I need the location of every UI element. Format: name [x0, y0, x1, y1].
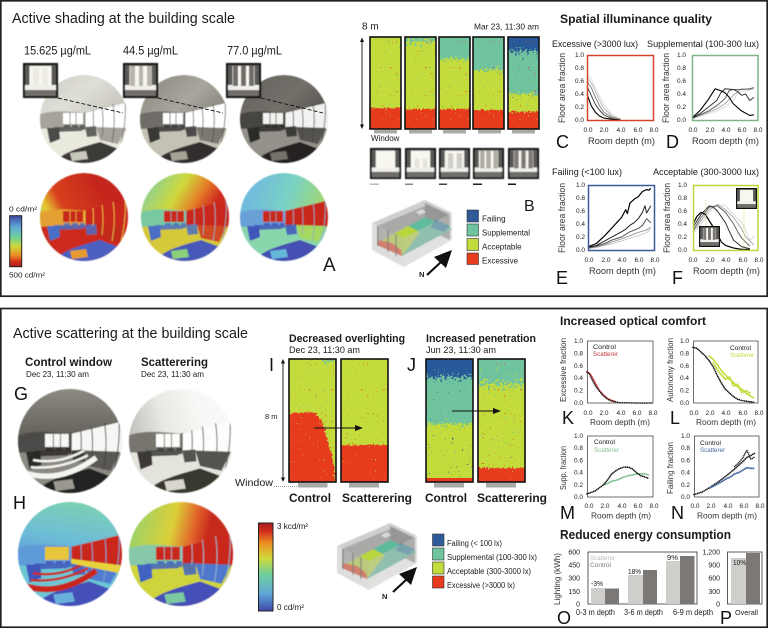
- chart E: failing: [552, 167, 660, 277]
- bar chart P: overall: 1,200: [702, 550, 720, 556]
- panel letter H: H: [13, 493, 26, 513]
- heading: decreased overlighting: Dec 23, 11:30 am: [289, 345, 360, 355]
- north arrow B: [419, 250, 452, 279]
- chart E: failing: 0.4: [576, 221, 585, 228]
- window bars I/J: [298, 483, 516, 488]
- heatmap B3: [438, 36, 471, 130]
- chart K: excessive fraction: 2.0: [599, 410, 609, 417]
- panel letter F: F: [672, 268, 683, 288]
- chart E: failing: 0.0: [576, 247, 585, 254]
- panel letter D: D: [666, 132, 679, 152]
- concentration labels: 44.5 µg/mL: [123, 46, 179, 58]
- concentration labels: [24, 46, 283, 58]
- chart K: excessive fraction: 0.0: [574, 400, 583, 407]
- chart L: autonomy fraction: [665, 338, 764, 427]
- colour bar A: 0 cd/m²: [9, 206, 38, 214]
- 8 m label: 8 m: [265, 412, 278, 421]
- panel B header: 8 m: [362, 22, 379, 32]
- chart E: failing: 0.6: [576, 208, 585, 215]
- chart D: supplemental: [647, 39, 763, 147]
- chart L: autonomy fraction: 0.2: [680, 388, 689, 395]
- bar chart O: lighting by depth: 600: [568, 550, 580, 556]
- window label: Window: [235, 478, 274, 489]
- inset B1: [370, 148, 401, 179]
- bar chart O: lighting by depth: Control: [590, 562, 612, 569]
- chart M: supplemental fraction: 0.2: [574, 482, 583, 489]
- chart D: supplemental: 0.0: [688, 127, 698, 134]
- panel letter I: I: [269, 355, 274, 375]
- chart E: failing: 0.2: [576, 234, 585, 241]
- chart N: failing fraction: 0.0: [690, 503, 700, 510]
- chart K: excessive fraction: Excessive fraction: [558, 338, 568, 402]
- chart N: failing fraction: 6.0: [739, 503, 749, 510]
- chart L: autonomy fraction: 6.0: [738, 410, 748, 417]
- shading dashed line: [58, 98, 323, 113]
- chart C: excessive: 1.0: [575, 52, 584, 59]
- chart F: acceptable: 0.0: [688, 257, 698, 264]
- heatmap labels: [289, 491, 547, 505]
- chart M: supplemental fraction: Supp. fraction: [558, 446, 568, 490]
- chart C: excessive: [552, 39, 659, 147]
- inset B5: [508, 148, 539, 179]
- panel B header: Mar 23, 11:30 am: [474, 22, 539, 32]
- chart F: acceptable: Acceptable (300-3000 lux): [653, 167, 759, 177]
- chart K: excessive fraction: 6.0: [632, 410, 642, 417]
- chart F: acceptable: 0.4: [678, 221, 687, 228]
- legend B: Supplemental: [482, 228, 530, 238]
- chart D: supplemental: 0.4: [677, 91, 686, 98]
- chart M: supplemental fraction: 6.0: [633, 503, 643, 510]
- chart E: failing: 8.0: [650, 257, 660, 264]
- bar chart O: lighting by depth: 450: [568, 562, 580, 570]
- colour bar H: [258, 522, 308, 612]
- chart L: autonomy fraction: Autonomy fraction: [665, 338, 675, 402]
- window inset row B: [370, 148, 539, 179]
- bar chart O: lighting by depth: 3-6 m depth: [624, 608, 663, 617]
- heading: scatterering: Dec 23, 11:30 am: [141, 370, 204, 379]
- chart C: excessive: 0.8: [575, 65, 584, 72]
- chart K: excessive fraction: 0.0: [583, 410, 593, 417]
- chart L: autonomy fraction: 0.6: [680, 363, 689, 370]
- chart C: excessive: Floor area fraction: [557, 53, 568, 123]
- chart E: failing: Failing (<100 lux): [552, 167, 622, 177]
- chart F: acceptable: 0.2: [678, 234, 687, 241]
- heading: increased penetration: Jun 23, 11:30 am: [426, 345, 496, 355]
- chart L: autonomy fraction: Room depth (m): [696, 417, 756, 427]
- chart E: failing: 0.8: [576, 195, 585, 202]
- heatmap J control: [425, 358, 474, 483]
- fisheye: control window render: [15, 389, 125, 496]
- chart L: autonomy fraction: 1.0: [680, 338, 689, 345]
- legend B: [467, 210, 530, 266]
- window inset: 15.625: [23, 63, 58, 98]
- chart N: failing fraction: 2.0: [706, 503, 716, 510]
- panel: active scattering frame: [1, 308, 767, 627]
- luminance map: scatterering: [126, 502, 236, 609]
- chart C: excessive: 0.0: [575, 117, 584, 124]
- colour bar H: 0 cd/m²: [277, 603, 304, 612]
- chart K: excessive fraction: Control: [593, 344, 617, 351]
- chart L: autonomy fraction: 0.8: [680, 350, 689, 357]
- chart K: excessive fraction: 0.6: [574, 363, 583, 370]
- concentration labels: 15.625 µg/mL: [24, 46, 92, 58]
- chart M: supplemental fraction: 2.0: [600, 503, 610, 510]
- bar chart O: lighting by depth: 0: [576, 602, 580, 608]
- chart M: supplemental fraction: [558, 433, 659, 520]
- legend I/J: Acceptable (300-3000 lx): [447, 567, 531, 576]
- chart M: supplemental fraction: 4.0: [617, 503, 627, 510]
- chart C: excessive: Excessive (>3000 lux): [552, 39, 638, 49]
- bar chart O: lighting by depth: 0-3 m depth: [576, 608, 615, 617]
- chart L: autonomy fraction: 0.0: [689, 410, 699, 417]
- panel letter G: G: [14, 384, 28, 404]
- chart L: autonomy fraction: 2.0: [705, 410, 715, 417]
- chart C: excessive: 0.6: [575, 78, 584, 85]
- heading: increased penetration: [426, 333, 536, 355]
- title: active shading: Active shading at the building scale: [12, 11, 235, 27]
- chart F: acceptable: 0.0: [678, 247, 687, 254]
- legend B: Acceptable: [482, 242, 522, 252]
- inset B4: [473, 148, 504, 179]
- heading: control window: [25, 355, 113, 379]
- chart C: excessive: 2.0: [599, 127, 609, 134]
- heading: control window: Control window: [25, 355, 113, 369]
- window label: [235, 478, 298, 489]
- chart N: failing fraction: 4.0: [723, 503, 733, 510]
- chart N: failing fraction: 0.2: [681, 482, 690, 489]
- chart L: autonomy fraction: 8.0: [754, 410, 764, 417]
- heatmap B4: [472, 36, 505, 130]
- chart D: supplemental: 2.0: [705, 127, 715, 134]
- colour bar H: 3 kcd/m²: [277, 522, 308, 531]
- panel letter P: P: [720, 608, 732, 628]
- chart F: acceptable: 1.0: [678, 182, 687, 189]
- bar chart O: lighting by depth: 6-9 m depth: [673, 608, 713, 617]
- chart K: excessive fraction: Room depth (m): [590, 417, 650, 427]
- depth arrow I: [281, 359, 285, 482]
- north arrow B: N: [419, 270, 424, 279]
- chart N: failing fraction: 1.0: [681, 433, 690, 440]
- inset B3: [439, 148, 470, 179]
- chart L: autonomy fraction: 0.0: [680, 400, 689, 407]
- chart F: acceptable: Floor area fraction: [662, 183, 673, 253]
- panel letter N: N: [671, 503, 684, 523]
- legend I/J: Failing (< 100 lx): [447, 539, 502, 548]
- depth arrow B: [360, 38, 364, 129]
- panel letter J: J: [407, 355, 416, 375]
- bar chart P: overall: 10%: [733, 558, 746, 567]
- bar chart P: overall: 900: [708, 562, 720, 570]
- panel letter E: E: [556, 268, 568, 288]
- chart E: failing: 0.0: [584, 257, 594, 264]
- bar chart P: overall: [702, 550, 762, 617]
- chart E: failing: 1.0: [576, 182, 585, 189]
- bar chart O: lighting by depth: 150: [568, 589, 580, 596]
- bar chart O: lighting by depth: Scatterer: [590, 555, 616, 562]
- bar chart P: overall: Overall: [735, 608, 758, 617]
- chart F: acceptable: 6.0: [738, 257, 748, 264]
- chart C: excessive: 4.0: [616, 127, 626, 134]
- heading: scatterering: [141, 355, 208, 379]
- heatmap labels: Scatterering: [342, 491, 412, 505]
- window inset: 77.0: [226, 63, 261, 98]
- chart E: failing: Floor area fraction: [557, 183, 568, 253]
- chart K: excessive fraction: 4.0: [616, 410, 626, 417]
- panel letter C: C: [556, 132, 569, 152]
- heading: spatial illuminance quality: Spatial illuminance quality: [560, 12, 712, 26]
- panel: active shading frame: [1, 1, 767, 296]
- chart D: supplemental: 0.2: [677, 104, 686, 111]
- heatmap labels: Scatterering: [477, 491, 547, 505]
- chart M: supplemental fraction: 0.0: [584, 503, 594, 510]
- legend I/J: Excessive (>3000 lx): [447, 581, 515, 590]
- chart E: failing: Room depth (m): [589, 266, 656, 277]
- heatmap B2: [404, 36, 437, 130]
- panel letter B: B: [524, 198, 535, 215]
- chart D: supplemental: 8.0: [753, 127, 763, 134]
- bar chart O: lighting by depth: -3%: [591, 579, 603, 588]
- chart C: excessive: 0.0: [583, 127, 593, 134]
- north arrow I/J: N: [382, 592, 387, 601]
- chart F: acceptable: 2.0: [705, 257, 715, 264]
- chart M: supplemental fraction: 0.4: [574, 470, 583, 477]
- chart D: supplemental: 0.8: [677, 65, 686, 72]
- chart K: excessive fraction: 8.0: [648, 410, 658, 417]
- chart M: supplemental fraction: Control: [594, 439, 616, 446]
- heading: decreased overlighting: Decreased overlighting: [289, 333, 405, 345]
- chart N: failing fraction: Room depth (m): [697, 510, 757, 520]
- chart N: failing fraction: 0.6: [681, 457, 690, 464]
- arrow: overlighting reduction: [314, 425, 363, 431]
- chart D: supplemental: 1.0: [677, 52, 686, 59]
- chart F: acceptable: 8.0: [754, 257, 764, 264]
- legend B: Excessive: [482, 256, 519, 266]
- colour bar A: 500 cd/m²: [9, 272, 46, 280]
- chart M: supplemental fraction: 0.0: [574, 494, 583, 501]
- heading: control window: Dec 23, 11:30 am: [26, 370, 89, 379]
- bar chart O: lighting by depth: 300: [568, 576, 580, 582]
- arrow: penetration increase: [452, 408, 501, 414]
- fisheye: scatterering render: [126, 389, 236, 496]
- luminance map: 15.625: [38, 173, 130, 263]
- colour bar A: [9, 206, 46, 280]
- panel letter O: O: [557, 608, 571, 628]
- chart N: failing fraction: 8.0: [755, 503, 765, 510]
- luminance map: 44.5: [139, 173, 231, 263]
- chart M: supplemental fraction: Room depth (m): [591, 510, 651, 520]
- chart C: excessive: 6.0: [633, 127, 643, 134]
- false colour fisheye row: [38, 173, 330, 263]
- chart L: autonomy fraction: 4.0: [721, 410, 731, 417]
- concentration scale bars: [370, 184, 516, 185]
- fisheye G and H group: [15, 389, 236, 609]
- heading: reduced energy consumption: Reduced energy consumption: [560, 528, 731, 542]
- chart D: supplemental: 4.0: [721, 127, 731, 134]
- chart K: excessive fraction: Scatterer: [593, 351, 619, 358]
- inset: high concentration: [699, 226, 720, 247]
- chart K: excessive fraction: 0.8: [574, 350, 583, 357]
- heading: scatterering: Scatterering: [141, 355, 208, 369]
- chart D: supplemental: Floor area fraction: [661, 53, 672, 123]
- chart N: failing fraction: 0.8: [681, 445, 690, 452]
- luminance map: 77.0: [238, 173, 330, 263]
- luminance map: control window: [15, 502, 125, 609]
- inset: low concentration: [736, 188, 757, 209]
- panel letter M: M: [560, 503, 575, 523]
- chart L: autonomy fraction: Control: [730, 345, 752, 352]
- legend B: Failing: [482, 214, 506, 224]
- heatmap B5: [507, 36, 540, 130]
- legend I/J: [432, 534, 537, 590]
- chart C: excessive: 0.2: [575, 104, 584, 111]
- heatmap labels: Control: [425, 491, 467, 505]
- chart D: supplemental: 6.0: [737, 127, 747, 134]
- heatmap I control: [288, 358, 337, 483]
- chart F: acceptable: 0.8: [678, 195, 687, 202]
- bar chart P: overall: 300: [708, 589, 720, 596]
- heatmap labels: Control: [289, 491, 331, 505]
- north arrow I/J: [382, 567, 417, 601]
- 3D room model B: [372, 200, 452, 267]
- concentration labels: 77.0 µg/mL: [227, 46, 283, 58]
- chart C: excessive: Room depth (m): [588, 136, 655, 147]
- heatmap I scatterering: [340, 358, 389, 483]
- chart C: excessive: 0.4: [575, 91, 584, 98]
- chart D: supplemental: 0.6: [677, 78, 686, 85]
- fisheye: 15.625 ug/mL: [38, 75, 130, 165]
- chart D: supplemental: Supplemental (100-300 lux): [647, 39, 759, 49]
- chart M: supplemental fraction: 8.0: [649, 503, 659, 510]
- heading: decreased overlighting: [289, 333, 405, 355]
- window inset: 44.5: [123, 63, 158, 98]
- title: active scattering: Active scattering at the building scale: [13, 326, 248, 342]
- chart L: autonomy fraction: Scatterer: [730, 352, 755, 359]
- chart K: excessive fraction: 0.4: [574, 375, 583, 382]
- panel letter A: A: [323, 255, 336, 276]
- bar chart P: overall: 0: [716, 602, 720, 608]
- chart M: supplemental fraction: 0.8: [574, 445, 583, 452]
- panel letter L: L: [670, 408, 680, 428]
- chart K: excessive fraction: 0.2: [574, 388, 583, 395]
- fisheye renderings row: [38, 75, 330, 165]
- chart N: failing fraction: Failing fraction: [665, 442, 675, 494]
- 3D room model I/J: [337, 523, 417, 590]
- bar chart O: lighting by depth: [552, 550, 713, 617]
- panel letter K: K: [562, 408, 574, 428]
- chart N: failing fraction: Scatterer: [700, 447, 726, 454]
- fisheye: 77.0 ug/mL: [238, 75, 330, 165]
- inset B2: [405, 148, 436, 179]
- bar chart P: overall: 600: [708, 576, 720, 582]
- chart K: excessive fraction: [558, 338, 658, 427]
- chart E: failing: 6.0: [634, 257, 644, 264]
- panel B header: [362, 22, 539, 32]
- bar chart O: lighting by depth: 18%: [628, 567, 641, 576]
- chart N: failing fraction: 0.4: [681, 470, 690, 477]
- chart F: acceptable: [653, 167, 764, 277]
- window bars B: [374, 130, 535, 134]
- bar chart O: lighting by depth: 9%: [667, 553, 678, 562]
- chart D: supplemental: Room depth (m): [692, 136, 759, 147]
- chart C: excessive: 8.0: [649, 127, 659, 134]
- legend I/J: Supplemental (100-300 lx): [447, 553, 537, 562]
- chart M: supplemental fraction: 1.0: [574, 433, 583, 440]
- chart F: acceptable: 4.0: [721, 257, 731, 264]
- heading: increased optical comfort: Increased optical comfort: [560, 314, 706, 328]
- chart M: supplemental fraction: 0.6: [574, 457, 583, 464]
- heatmap B1: [369, 36, 402, 130]
- chart M: supplemental fraction: Scatterer: [594, 447, 620, 454]
- heatmap J scatterering: [477, 358, 526, 483]
- fisheye: 44.5 ug/mL: [138, 75, 230, 165]
- heading: increased penetration: Increased penetration: [426, 333, 536, 345]
- chart F: acceptable: 0.6: [678, 208, 687, 215]
- chart E: failing: 4.0: [617, 257, 627, 264]
- chart K: excessive fraction: 1.0: [574, 338, 583, 345]
- bar chart O: lighting by depth: Lighting (kWh): [552, 553, 562, 605]
- window label B: Window: [371, 134, 400, 143]
- chart F: acceptable: Room depth (m): [693, 266, 760, 277]
- chart E: failing: 2.0: [601, 257, 611, 264]
- chart N: failing fraction: [665, 433, 765, 520]
- chart L: autonomy fraction: 0.4: [680, 375, 689, 382]
- chart D: supplemental: 0.0: [677, 117, 686, 124]
- chart N: failing fraction: 0.0: [681, 494, 690, 501]
- chart N: failing fraction: Control: [700, 440, 722, 447]
